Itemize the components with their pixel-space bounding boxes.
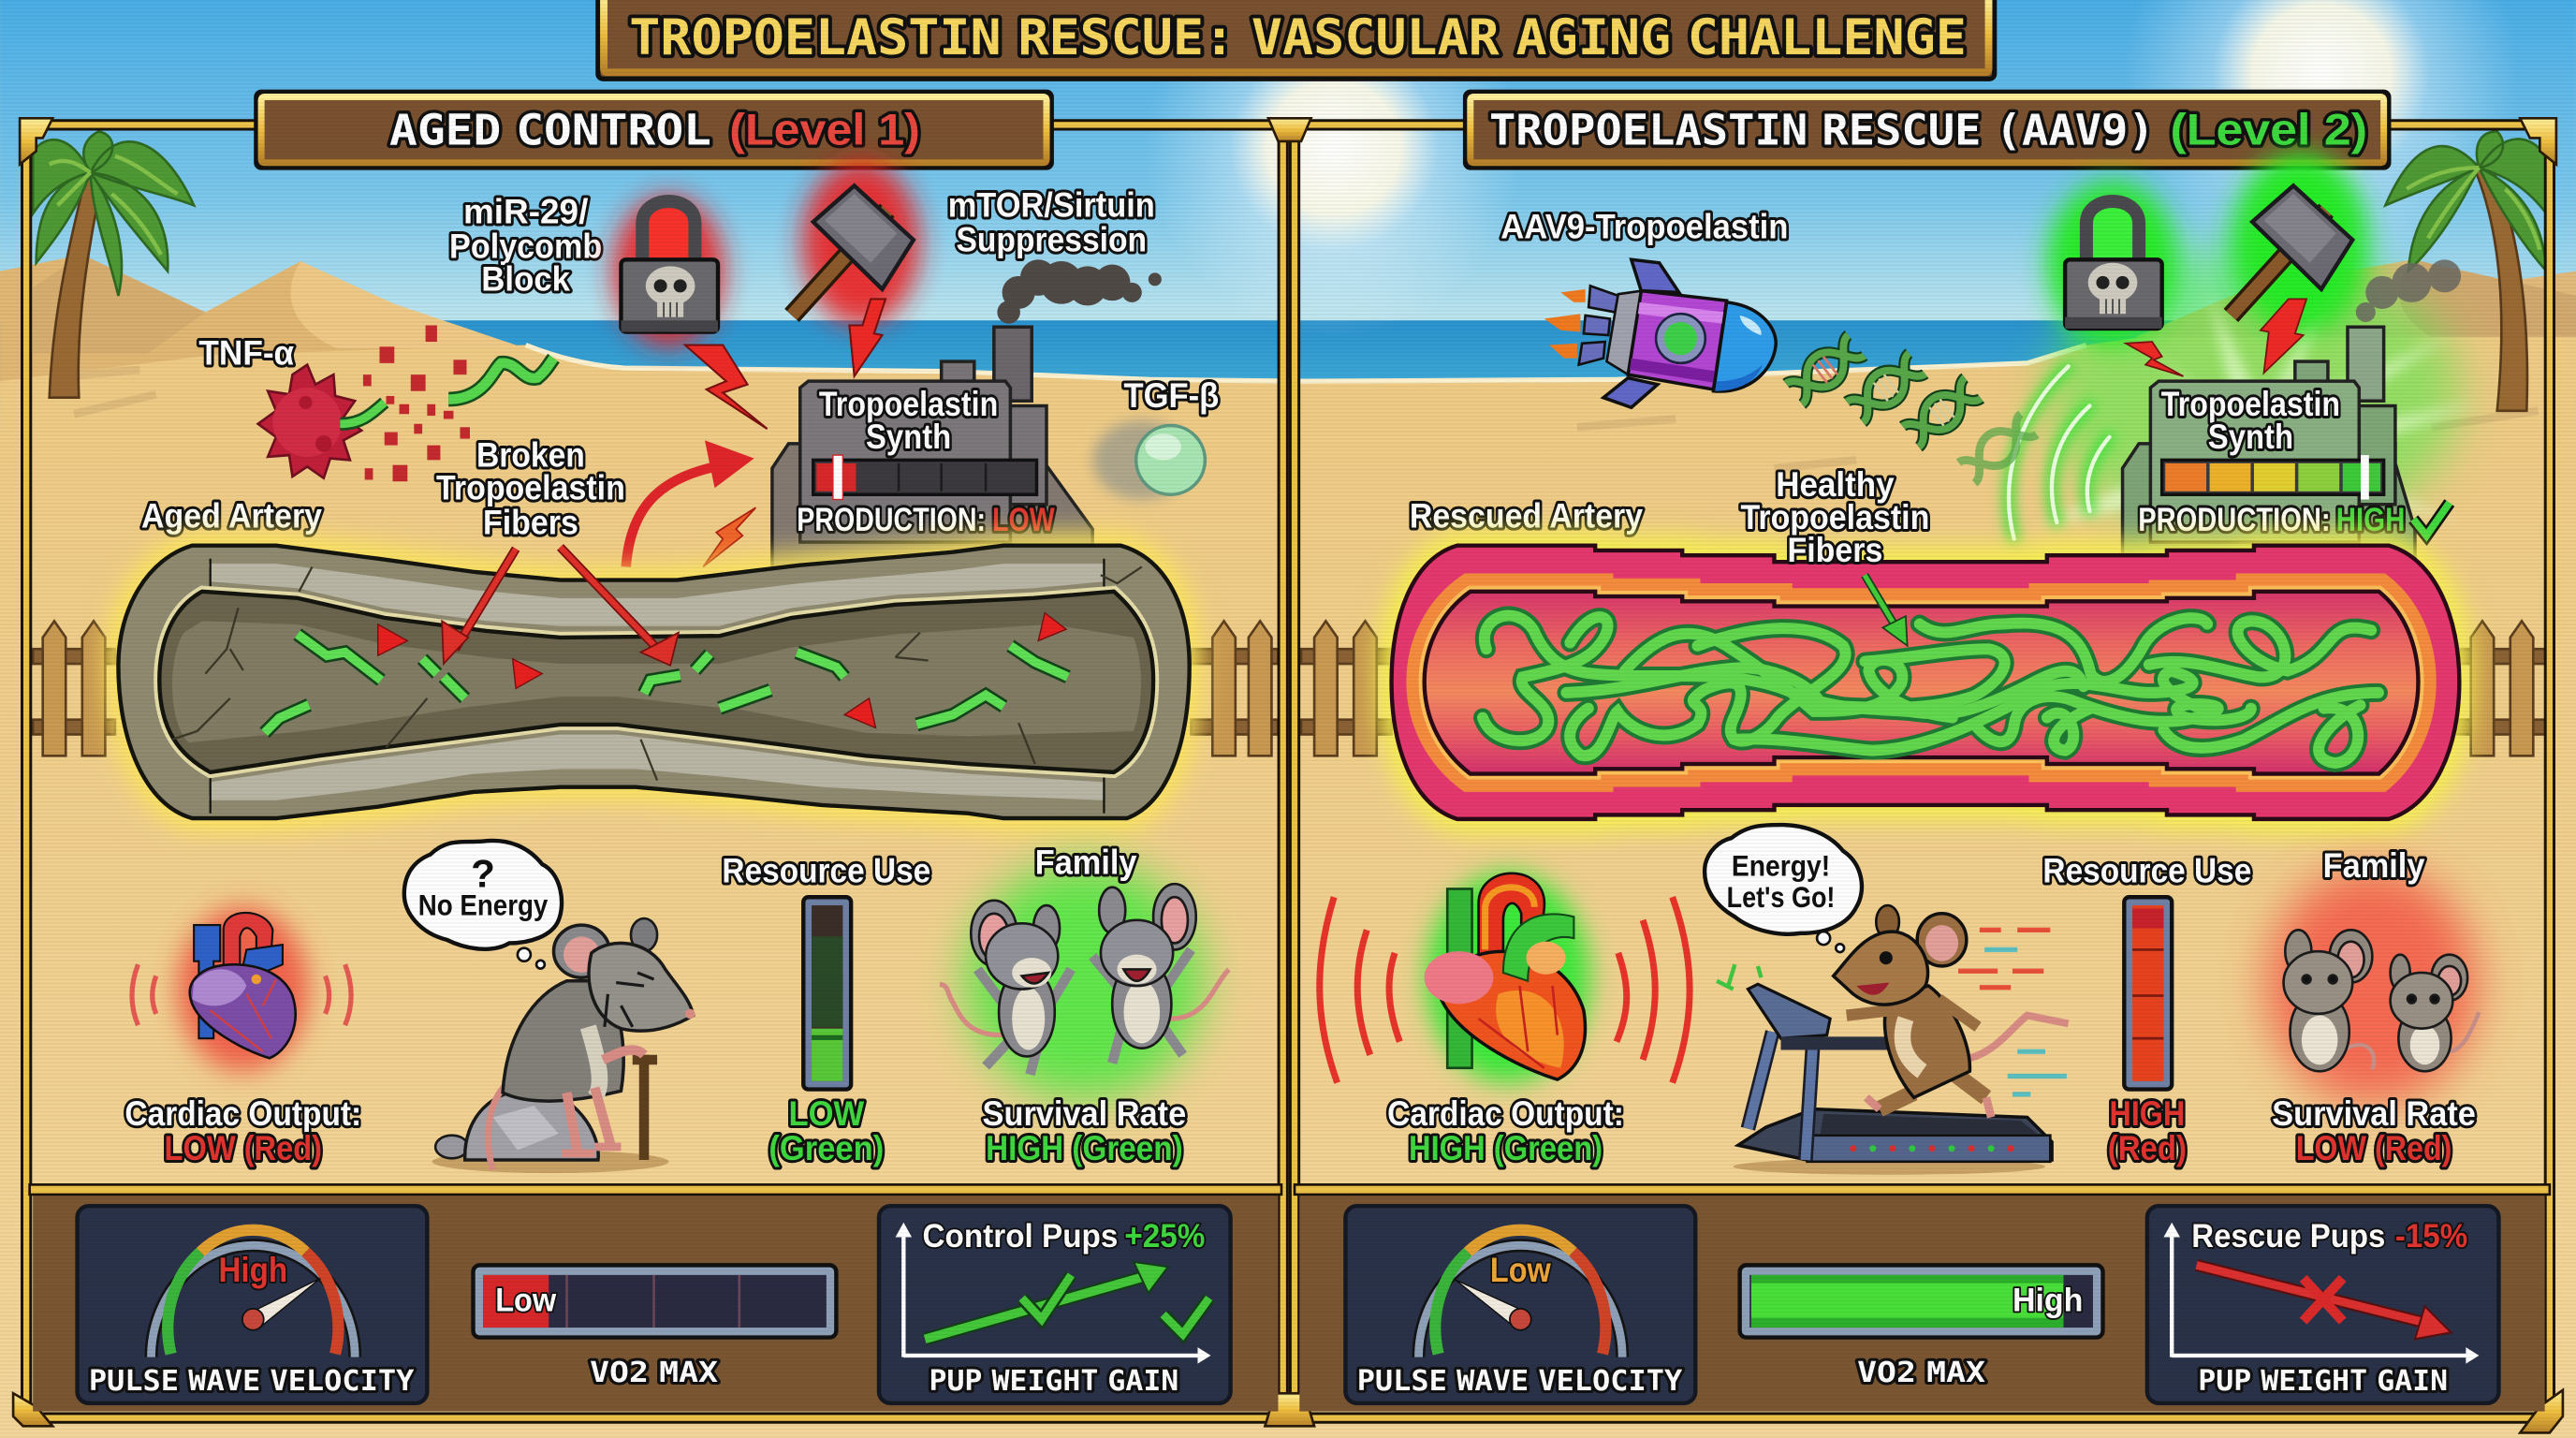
bolt: hammer to factory <box>849 299 886 376</box>
arrow: red curved feedback <box>626 440 754 566</box>
label: healthy tropoelastin fibers: Fibers <box>1788 531 1882 569</box>
icon: sad mouse pups with red glow <box>2267 868 2479 1104</box>
label: tropoelastin synth <box>819 385 998 456</box>
gauge: pulse wave velocity high: PULSE WAVE VELOCITY <box>89 1365 414 1398</box>
panel: aged metrics strip <box>30 1184 1281 1412</box>
bar: VO2 max low: Low <box>495 1283 557 1319</box>
label: broken tropoelastin fibers: Broken <box>476 435 585 474</box>
label: broken tropoelastin fibers: Fibers <box>483 503 578 541</box>
label: survival rate high: Survival Rate <box>983 1094 1186 1133</box>
callout: no energy thought bubble <box>404 841 562 969</box>
label: healthy tropoelastin fibers <box>1741 465 1929 569</box>
label: survival rate low: Survival Rate <box>2272 1094 2476 1133</box>
label: survival rate high <box>983 1094 1186 1167</box>
markers: red triangles <box>378 613 1066 727</box>
label: family: Family <box>1035 844 1137 882</box>
gauge: pulse wave velocity low <box>1345 1206 1695 1403</box>
panel: rescue metrics strip <box>1295 1184 2550 1412</box>
bolt: orange spark <box>703 507 755 566</box>
chart: pup weight gain control: Control Pups <box>923 1218 1118 1255</box>
label: TNF-alpha: TNF-α <box>198 334 295 373</box>
bar: VO2 max high: High <box>2012 1283 2083 1319</box>
label: tropoelastin synth: Tropoelastin <box>819 385 998 423</box>
icon: hammer with green glow <box>2231 153 2369 333</box>
label: production high: HIGH <box>2336 502 2405 538</box>
gauge: pulse wave velocity low: PULSE WAVE VELOCITY <box>1357 1365 1682 1398</box>
bolt: padlock to factory <box>685 345 768 429</box>
label: tropoelastin synth: Tropoelastin <box>2161 385 2340 423</box>
artery: rescued elastic vessel <box>1392 546 2459 819</box>
chart: pup weight gain control: +25% <box>1124 1218 1205 1255</box>
label: rescued artery: Rescued Artery <box>1410 496 1644 535</box>
label: healthy tropoelastin fibers: Healthy <box>1776 465 1895 504</box>
chart: pup weight gain control <box>879 1206 1231 1403</box>
panel: aged control frame <box>26 125 1283 1418</box>
icons: DNA strands <box>1784 332 2039 486</box>
label: family: Family <box>2323 846 2425 885</box>
label: miR-29/Polycomb Block <box>449 193 602 299</box>
label: tropoelastin synth: Synth <box>2208 418 2293 456</box>
label: cardiac output high <box>1387 1094 1624 1167</box>
label: tropoelastin synth: Synth <box>866 418 951 456</box>
label: tropoelastin synth <box>2161 385 2340 456</box>
palm tree left <box>33 131 194 398</box>
title banner: TROPOELASTIN RESCUE: VASCULAR AGING CHALLENGE <box>629 9 1967 66</box>
gauge: pulse wave velocity high: High <box>218 1251 287 1289</box>
label: low green: LOW <box>788 1094 864 1133</box>
bar: VO2 max low <box>474 1265 836 1389</box>
label: low green <box>768 1094 884 1167</box>
panel heading: aged control: (Level 1) <box>729 105 920 154</box>
bar: VO2 max low: VO2 MAX <box>590 1357 718 1389</box>
label: aged artery: Aged Artery <box>141 496 323 535</box>
arrow: pointing at healthy fibers <box>1865 575 1908 646</box>
arrows: pointing at broken fibers <box>442 547 679 666</box>
fence: left panel left side <box>33 621 115 756</box>
callout: no energy thought bubble: ? <box>471 852 495 896</box>
label: miR-29/Polycomb Block: miR-29/ <box>463 193 588 231</box>
title banner <box>598 0 1995 79</box>
label: low green: (Green) <box>768 1129 884 1167</box>
fibers: broken green fragments <box>265 634 1068 733</box>
label: mTOR/Sirtuin Suppression: mTOR/Sirtuin <box>948 186 1155 225</box>
label: production low: PRODUCTION: <box>797 502 986 538</box>
label: TGF-beta: TGF-β <box>1123 376 1219 415</box>
icon: locked padlock with red glow <box>613 196 724 346</box>
icon: check mark <box>2413 503 2450 536</box>
chart: pup weight gain control: PUP WEIGHT GAIN <box>929 1365 1178 1398</box>
callout: energy thought bubble: Energy! <box>1732 848 1830 882</box>
panel heading: aged control: AGED CONTROL <box>389 105 711 154</box>
bolt: red <box>2261 299 2306 373</box>
meter: resource use low: Resource Use <box>722 851 930 889</box>
gauge: pulse wave velocity low: Low <box>1490 1251 1551 1289</box>
smoke: aged factory <box>997 259 1162 324</box>
label: mTOR/Sirtuin Suppression: Suppression <box>956 221 1147 259</box>
chart: pup weight gain rescue: PUP WEIGHT GAIN <box>2198 1365 2448 1398</box>
artery: aged stiff vessel <box>118 546 1190 818</box>
chart: pup weight gain rescue <box>2147 1206 2498 1403</box>
palm tree right <box>2385 131 2546 411</box>
icon: weak purple heart <box>132 907 351 1071</box>
fence: left panel right side <box>1191 621 1278 756</box>
label: mTOR/Sirtuin Suppression <box>948 186 1155 259</box>
label: healthy tropoelastin fibers: Tropoelastin <box>1741 498 1929 536</box>
label: broken tropoelastin fibers <box>436 435 625 541</box>
wall: light stone bands <box>209 564 1104 800</box>
bar: VO2 max high <box>1740 1265 2102 1389</box>
label: high red <box>2108 1094 2187 1167</box>
meter: resource use high: Resource Use <box>2042 851 2251 889</box>
chart: pup weight gain rescue: -15% <box>2395 1218 2467 1255</box>
panel heading: aged control <box>256 92 1051 168</box>
label: AAV9-Tropoelastin: AAV9-Tropoelastin <box>1500 207 1788 245</box>
label: survival rate low <box>2272 1094 2476 1167</box>
label: cardiac output low <box>124 1094 361 1167</box>
label: cardiac output high: HIGH (Green) <box>1409 1129 1603 1167</box>
smoke: rescue factory <box>2356 259 2461 322</box>
label: survival rate high: HIGH (Green) <box>986 1129 1183 1167</box>
label: cardiac output high: Cardiac Output: <box>1387 1094 1624 1133</box>
callout: energy thought bubble: Let's Go! <box>1727 880 1835 914</box>
icon: TNF-alpha virus <box>258 365 361 478</box>
label: broken tropoelastin fibers: Tropoelastin <box>436 469 625 507</box>
fence: right panel left side <box>1301 621 1392 756</box>
meter: resource use high <box>2042 851 2251 1167</box>
icon: unlocked padlock with green glow <box>2047 181 2178 345</box>
panel heading: rescue <box>1466 92 2389 168</box>
chart: pup weight gain rescue: Rescue Pups <box>2191 1218 2385 1255</box>
icon: running mouse on treadmill <box>1717 905 2069 1175</box>
factory: tropoelastin synth high <box>2123 327 2415 575</box>
glow: rescue factory light burst <box>2037 246 2481 542</box>
panel heading: rescue: (Level 2) <box>2170 105 2367 154</box>
label: high red: (Red) <box>2108 1129 2187 1167</box>
waves: green expression arcs <box>2009 366 2110 539</box>
factory: tropoelastin synth low <box>772 327 1092 575</box>
callout: no energy thought bubble: No Energy <box>418 888 549 922</box>
bolt: small red <box>2126 342 2183 376</box>
label: miR-29/Polycomb Block: Block <box>481 260 571 299</box>
label: survival rate low: LOW (Red) <box>2296 1129 2452 1167</box>
fence: right panel right side <box>2456 621 2546 756</box>
meter: resource use low <box>722 851 930 1167</box>
label: production high: PRODUCTION: <box>2138 502 2331 538</box>
meter: production high <box>2162 455 2384 500</box>
bar: VO2 max high: VO2 MAX <box>1857 1357 1985 1389</box>
label: miR-29/Polycomb Block: Polycomb <box>449 227 602 266</box>
icon: check mark fill <box>2413 503 2450 536</box>
label: cardiac output low: Cardiac Output: <box>124 1094 361 1133</box>
label: cardiac output low: LOW (Red) <box>165 1129 322 1167</box>
icon: AAV9 rocket <box>1544 259 1776 407</box>
fibers: healthy green tangle <box>1483 616 2378 763</box>
debris: fragmented fibers <box>340 325 554 481</box>
gauge: pulse wave velocity high <box>78 1206 427 1403</box>
panel: rescue frame <box>1295 125 2550 1418</box>
meter: production low <box>813 455 1036 500</box>
icon: strong heart with green glow <box>1320 873 1690 1083</box>
icon: old mouse on rock with cane <box>432 918 695 1173</box>
label: production low: LOW <box>992 502 1055 538</box>
icon: TGF-beta sphere <box>1092 420 1205 500</box>
panel heading: rescue: TROPOELASTIN RESCUE (AAV9) <box>1489 105 2155 154</box>
icon: happy mouse family with green glow <box>940 862 1229 1099</box>
icon: hammer with red glow <box>792 161 920 325</box>
callout: energy thought bubble <box>1705 825 1862 952</box>
label: high red: HIGH <box>2110 1094 2185 1133</box>
